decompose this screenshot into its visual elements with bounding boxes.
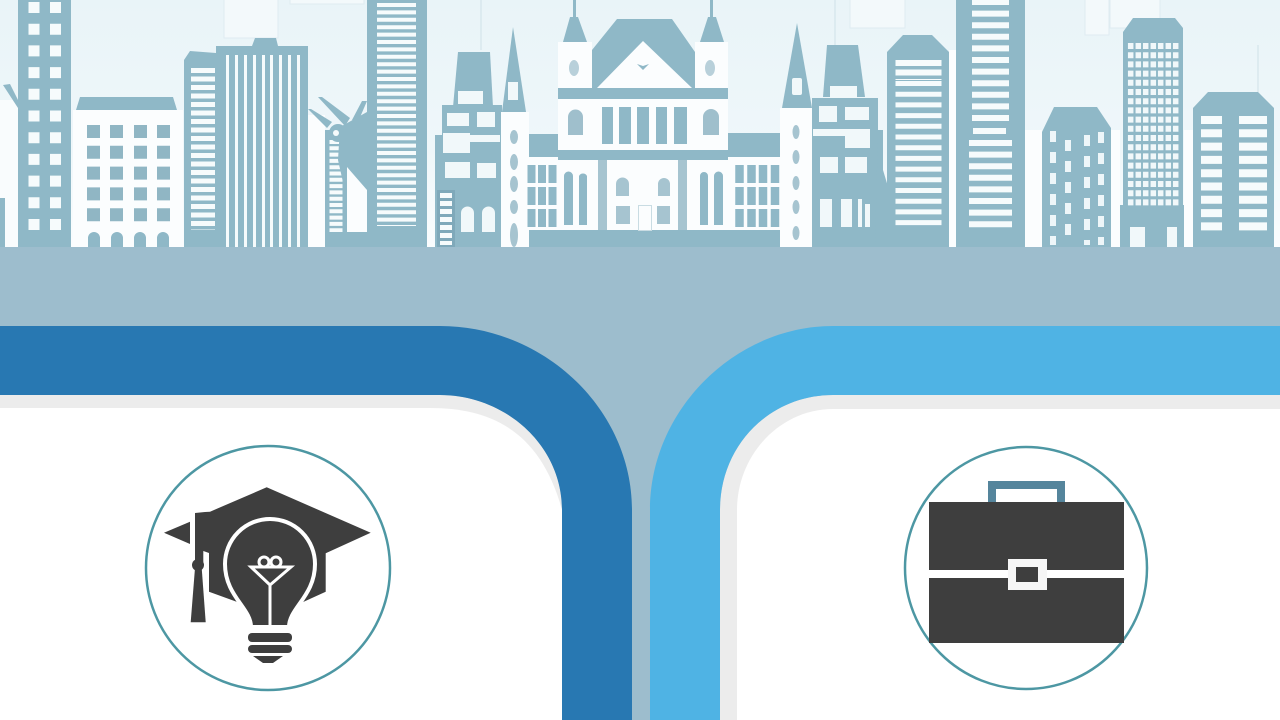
right cluster building	[812, 45, 889, 248]
palace upper walls	[558, 41, 728, 160]
clasp	[1008, 559, 1047, 590]
palace base	[529, 225, 780, 248]
right spire tower	[780, 23, 812, 247]
circle outline	[146, 446, 390, 690]
gap	[949, 50, 956, 248]
left spire tower	[501, 27, 529, 247]
striped tower	[184, 38, 308, 248]
roof and domes	[563, 0, 724, 90]
tall tower B	[956, 0, 1025, 248]
white panel: right	[720, 395, 1280, 720]
skyline: left section	[0, 0, 427, 248]
handle	[992, 485, 1061, 503]
icon: briefcase	[905, 447, 1147, 689]
white panel: left	[0, 395, 562, 720]
tall striped tower	[367, 0, 427, 248]
irregular window building C	[1042, 107, 1111, 248]
grid window tower D	[1120, 18, 1184, 248]
gap	[1184, 130, 1193, 248]
light bulb	[225, 519, 315, 663]
faint background buildings	[224, 0, 1258, 92]
tassel	[192, 559, 204, 571]
case body	[929, 502, 1124, 570]
circle outline	[905, 447, 1147, 689]
left cluster building	[435, 52, 502, 248]
tower E	[1193, 92, 1274, 248]
white gap building	[308, 115, 325, 248]
skyline: central palace	[435, 0, 889, 248]
icon: graduation cap with light bulb	[146, 446, 390, 690]
far left white building	[0, 84, 18, 248]
gap	[1111, 130, 1120, 248]
tower with square windows	[18, 0, 71, 248]
graduation cap	[164, 487, 371, 622]
white office block	[73, 97, 183, 248]
road band: dark blue	[0, 326, 632, 720]
wings	[529, 134, 558, 160]
road band: light blue	[650, 326, 1280, 720]
ground band	[0, 247, 1280, 720]
gap	[1025, 130, 1042, 248]
wind turbine and small block	[308, 97, 367, 248]
skyline: right section	[887, 0, 1274, 248]
sky background	[0, 0, 1280, 250]
striped tower A	[887, 35, 949, 248]
palace lower walls	[528, 150, 780, 230]
